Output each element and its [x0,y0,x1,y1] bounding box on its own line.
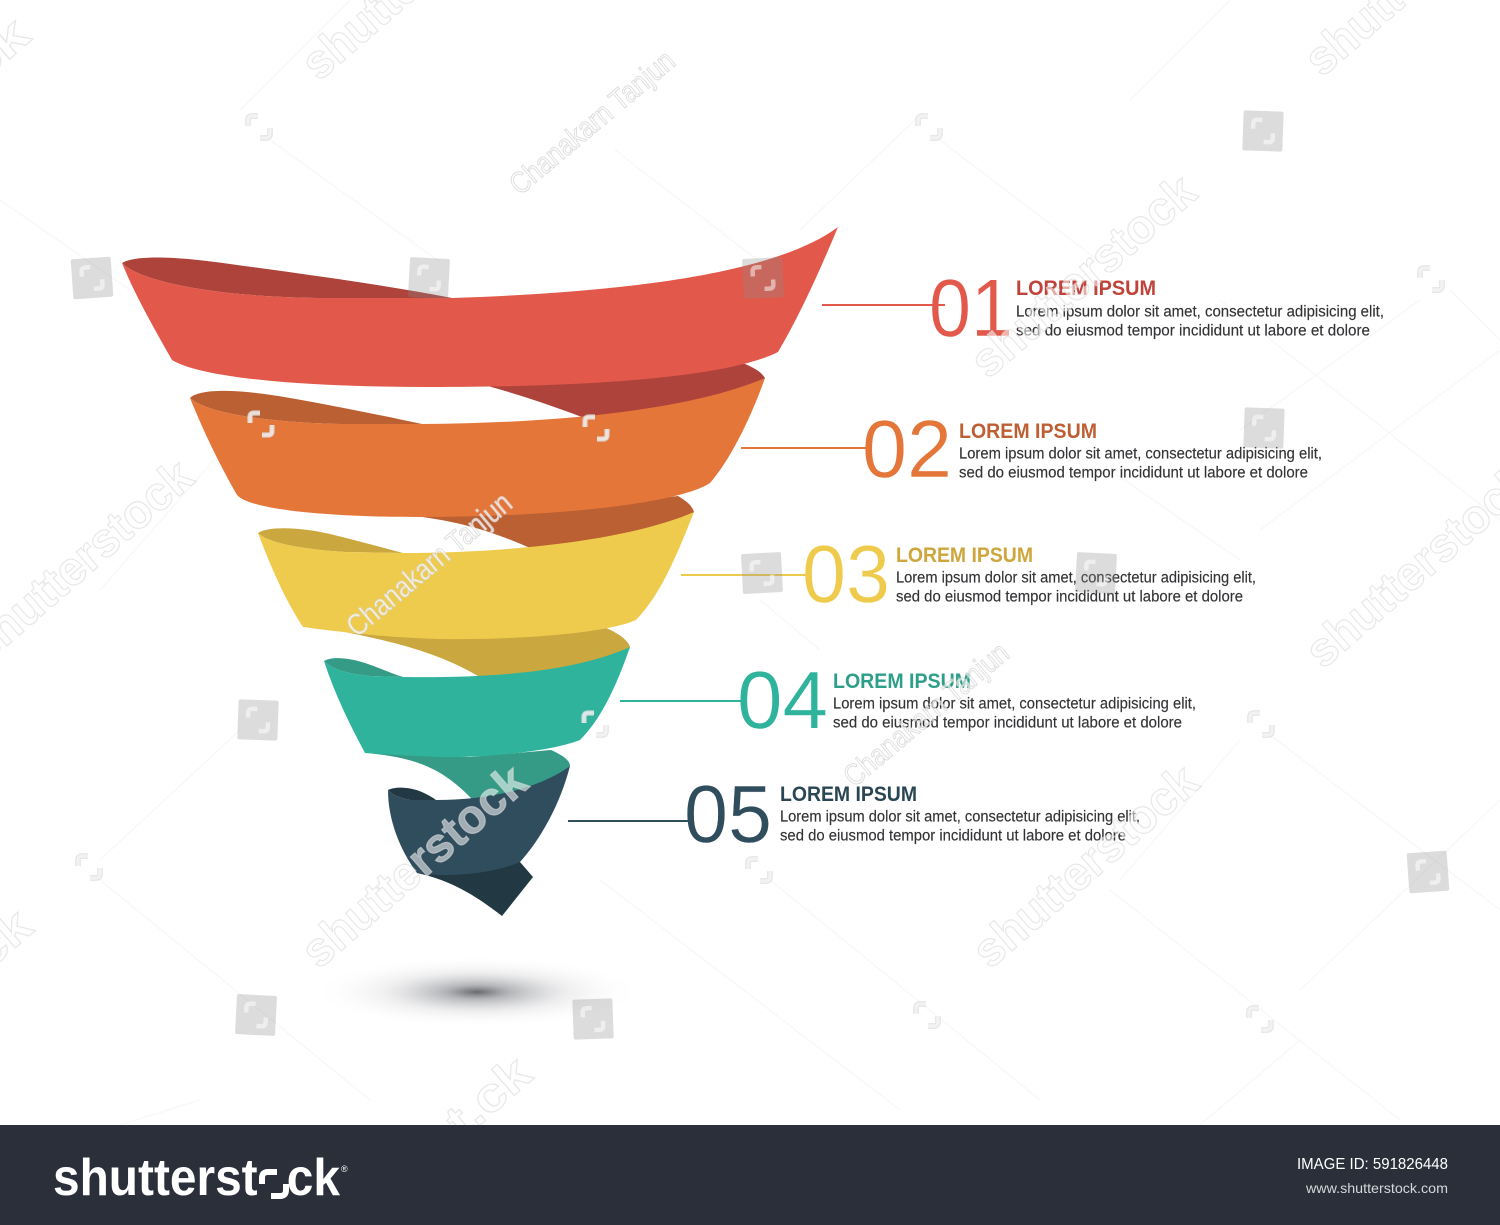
band 01: lower back fold [488,361,765,430]
body 05: sed do eiusmod tempor incididunt ut labore et dolore [780,828,1126,844]
logo bracket mark [262,1172,286,1196]
image id: IMAGE ID: 591826448 [1297,1156,1448,1173]
band 03: inner fold [258,528,403,553]
heading 03: LOREM IPSUM [896,544,1033,567]
item 01 [929,263,1384,354]
funnel [122,227,838,916]
body 03: Lorem ipsum dolor sit amet, consectetur adipisicing elit, [896,570,1256,586]
heading 02: LOREM IPSUM [959,420,1097,443]
number 04: 04 [737,655,828,746]
band 03: lower back fold [345,628,630,690]
registered mark: ® [341,1164,348,1174]
footer bar [0,1125,1500,1225]
footer logo: shutterstock [53,1149,340,1207]
watermark squares [71,110,1449,1040]
band 02: lower back fold [415,496,694,565]
body 03: sed do eiusmod tempor incididunt ut labore et dolore [896,588,1243,606]
body 02: sed do eiusmod tempor incididunt ut labore et dolore [959,464,1308,482]
number 02: 02 [862,404,952,495]
connector lines [568,305,945,821]
drop shadow under funnel [312,956,642,1028]
watermark text: Chanakarn Tanjun [503,44,682,201]
band 02: orange ribbon [190,378,765,517]
number 03: 03 [802,529,890,620]
watermark text: shutterstock [962,754,1209,978]
heading 05: LOREM IPSUM [780,783,917,806]
body 01: Lorem ipsum dolor sit amet, consectetur adipisicing elit, [1016,304,1384,320]
item 04 [737,655,1196,746]
body 02: Lorem ipsum dolor sit amet, consectetur adipisicing elit, [959,446,1322,462]
band 04: lower back fold [365,750,570,810]
body 04: sed do eiusmod tempor incididunt ut labore et dolore [833,714,1182,732]
body 01: sed do eiusmod tempor incididunt ut labore et dolore [1016,322,1370,340]
watermark text: Chanakarn Tanjun [340,486,519,643]
band 04: teal ribbon [324,647,630,757]
watermark text: shutterstock [960,164,1207,388]
heading 04: LOREM IPSUM [833,670,971,693]
watermark text: shutterstock [291,754,538,978]
watermark text: Chanakarn Tanjun [837,636,1016,793]
band 03: yellow ribbon [258,512,694,639]
band 02: inner fold [190,391,422,424]
item 02 [862,404,1322,495]
number 05: 05 [684,769,772,860]
band 04: inner fold [324,658,403,677]
band 05: navy ribbon [388,766,570,875]
body 04: Lorem ipsum dolor sit amet, consectetur adipisicing elit, [833,696,1196,712]
band 01: red ribbon [122,227,838,387]
watermark text: st.ck [412,1046,542,1168]
item 05 [684,769,1140,860]
band 05: lower tail [417,860,533,916]
band 01: inner fold [122,257,452,298]
number 01: 01 [929,263,1013,354]
heading 01: LOREM IPSUM [1016,277,1156,300]
body 05: Lorem ipsum dolor sit amet, consectetur adipisicing elit, [780,808,1140,826]
item 03 [802,529,1256,620]
website: www.shutterstock.com [1305,1180,1448,1196]
watermark small icons [78,116,1442,1030]
band 05: inner fold [388,788,436,800]
